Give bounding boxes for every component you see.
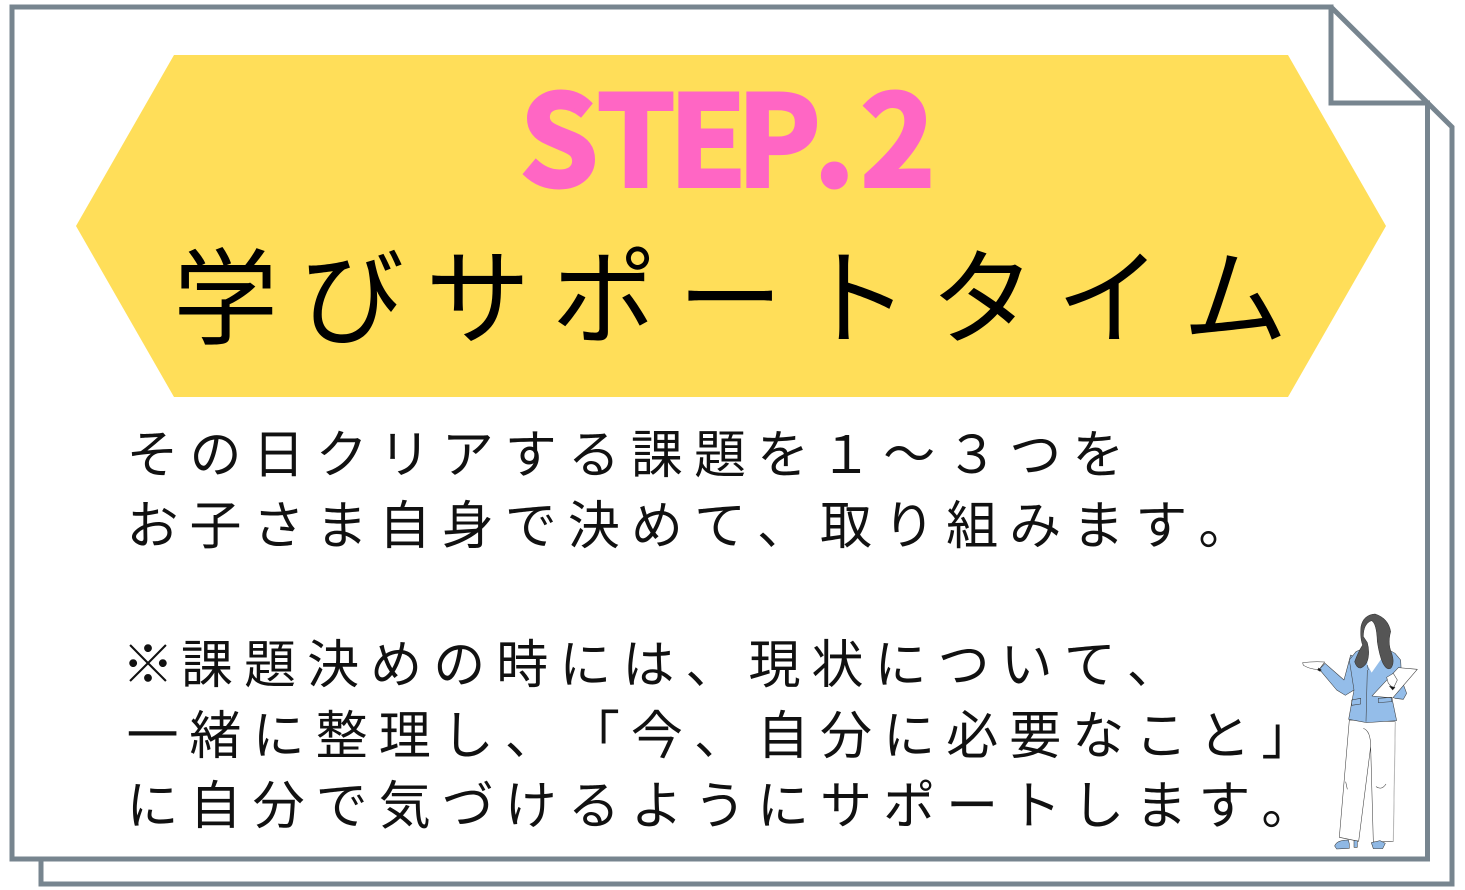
text block: note: ※ <box>122 637 185 695</box>
right hand <box>1387 673 1397 688</box>
clipboard <box>1372 668 1417 698</box>
title: 学びサポートタイム <box>173 242 1309 359</box>
text block: note: に自分で気づけるようにサポートします。 <box>126 778 1324 836</box>
neck <box>1367 642 1382 673</box>
text block: note: 一緒に整理し、「今、自分に必要なこと」 <box>126 708 1324 766</box>
left arm <box>1319 655 1360 695</box>
shoes <box>1335 840 1385 849</box>
step label: STEP.2 <box>520 41 935 222</box>
left hand <box>1303 662 1325 669</box>
text block: description: その日クリアする課題を１～３つを <box>126 427 1135 485</box>
jacket <box>1349 643 1407 723</box>
trousers <box>1339 720 1395 842</box>
text block: note: 課題決めの時には、現状について、 <box>181 637 1190 695</box>
text block: note <box>122 637 1324 836</box>
text block: description: お子さま自身で決めて、取り組みます。 <box>126 498 1261 556</box>
icon: presenting woman <box>1303 614 1417 849</box>
jacket seams <box>1352 665 1392 722</box>
cuffs <box>1318 668 1395 690</box>
text block: description <box>126 427 1261 556</box>
hair <box>1355 614 1393 669</box>
header hexagon banner <box>76 55 1386 397</box>
